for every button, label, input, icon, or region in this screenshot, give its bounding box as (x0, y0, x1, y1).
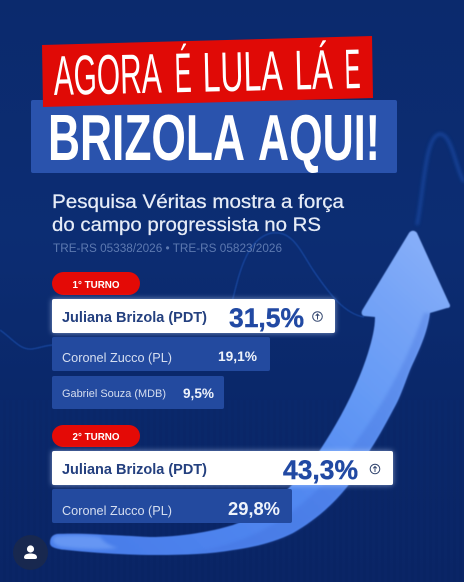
badge: 2º turno: 2° TURNO (72, 432, 120, 443)
title line: AGORA É LULA LÁ E: AGORA (53, 42, 163, 107)
title banner: red: E (344, 37, 361, 100)
row: Coronel Zucco first round: Coronel Zucco (PL) (62, 350, 172, 365)
title line: AGORA É LULA LÁ E: LULA (202, 39, 284, 104)
row: Coronel Zucco first round: 19,1% (218, 348, 258, 364)
row: Juliana Brizola first round: 31,5% (229, 303, 304, 333)
icon: profile avatar (13, 535, 48, 570)
title banner: blue (31, 100, 397, 174)
row: Juliana Brizola first round (52, 299, 335, 333)
icon: up arrow in circle (313, 312, 322, 321)
row: Coronel Zucco second round: Coronel Zucco (PL) (62, 503, 172, 518)
title banner: red (42, 36, 373, 107)
source registration note: TRE-RS 05338/2026 • TRE-RS 05823/2026 (53, 243, 282, 255)
badge: 1º turno: 1° TURNO (72, 280, 120, 291)
icon: up arrow in circle (370, 464, 380, 474)
arrow: rising trend (50, 231, 450, 555)
badge: 2º turno (52, 425, 140, 447)
subtitle: do campo progressista no RS (52, 215, 321, 236)
badge: 1º turno (52, 272, 140, 295)
subtitle: Pesquisa Véritas mostra a força (52, 192, 344, 213)
row: Juliana Brizola second round: Juliana Brizola (PDT) (62, 462, 207, 478)
panel: second round (52, 425, 393, 523)
row: Gabriel Souza first round: Gabriel Souza (MDB) (62, 388, 166, 400)
subtitle (52, 192, 344, 236)
row: Coronel Zucco first round (52, 337, 270, 371)
title line: BRIZOLA AQUI!: AQUI! (258, 101, 380, 174)
title line: AGORA É LULA LÁ E (53, 37, 361, 107)
row: Gabriel Souza first round (52, 376, 224, 409)
title line: BRIZOLA AQUI!: BRIZOLA (48, 101, 245, 174)
row: Coronel Zucco second round (52, 489, 292, 523)
row: Juliana Brizola second round (52, 451, 393, 485)
row: Coronel Zucco second round: 29,8% (228, 498, 280, 519)
panel: first round (52, 272, 335, 409)
row: Juliana Brizola first round: Juliana Brizola (PDT) (62, 310, 207, 326)
row: Gabriel Souza first round: 9,5% (183, 385, 215, 401)
title line: AGORA É LULA LÁ E: LÁ (294, 38, 334, 102)
row: Juliana Brizola second round: 43,3% (283, 455, 358, 485)
title line: AGORA É LULA LÁ E: É (174, 41, 192, 104)
